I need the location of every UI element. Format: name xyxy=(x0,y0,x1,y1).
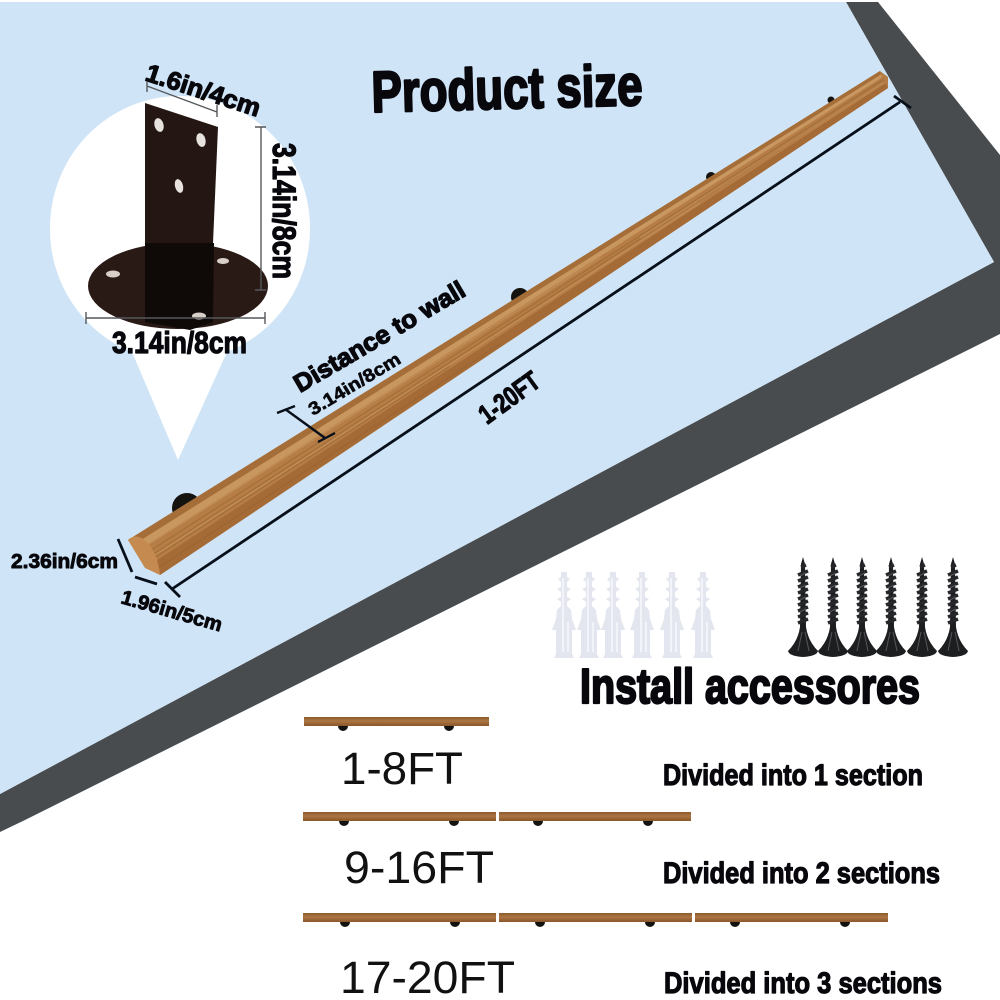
wooden rail xyxy=(128,71,888,575)
heading: install accessories: Install accessores xyxy=(580,660,920,714)
icon: wall plugs xyxy=(552,572,715,658)
title: Product size xyxy=(371,53,643,125)
light blue wall panel xyxy=(0,2,994,794)
panel: main handrail xyxy=(11,71,911,636)
label: rail height: 2.36in/6cm xyxy=(11,551,118,573)
length label: 1-8FT xyxy=(341,743,463,794)
section label: Divided into 2 sections xyxy=(663,857,940,890)
label: bracket width: 1.6in/4cm xyxy=(142,59,264,122)
row: 17-20FT xyxy=(303,913,942,1000)
section label: Divided into 3 sections xyxy=(664,967,942,1000)
dimension: distance to wall xyxy=(277,406,335,442)
label: distance to wall: Distance to wall xyxy=(289,276,470,398)
rail diagram: two sections xyxy=(303,812,691,826)
label: bracket height: 3.14in/8cm xyxy=(266,143,302,279)
dimension lines on bracket xyxy=(86,82,266,324)
rail diagram: one section xyxy=(304,717,489,731)
row: 1-8FT xyxy=(304,717,923,794)
label: base diameter: 3.14in/8cm xyxy=(112,325,247,360)
panel: bracket close-up xyxy=(50,59,310,460)
label: rail width: 1.96in/5cm xyxy=(119,587,225,636)
label: distance value: 3.14in/8cm xyxy=(305,349,404,419)
icon: wall brackets behind rail xyxy=(172,96,834,523)
dimension: length line xyxy=(165,96,911,597)
icon: bracket upright plate xyxy=(145,103,218,330)
rail end cap xyxy=(128,536,160,575)
length label: 9-16FT xyxy=(344,842,494,893)
icon: bracket base plate xyxy=(88,243,268,329)
icon: screws xyxy=(788,557,968,657)
label: length: 1-20FT xyxy=(473,365,546,430)
rail diagram: three sections xyxy=(303,913,888,927)
white callout circle with pointer xyxy=(50,96,310,460)
section label: Divided into 1 section xyxy=(663,759,923,792)
row: 9-16FT xyxy=(303,812,940,893)
dimension: end height and width ticks xyxy=(118,539,157,584)
